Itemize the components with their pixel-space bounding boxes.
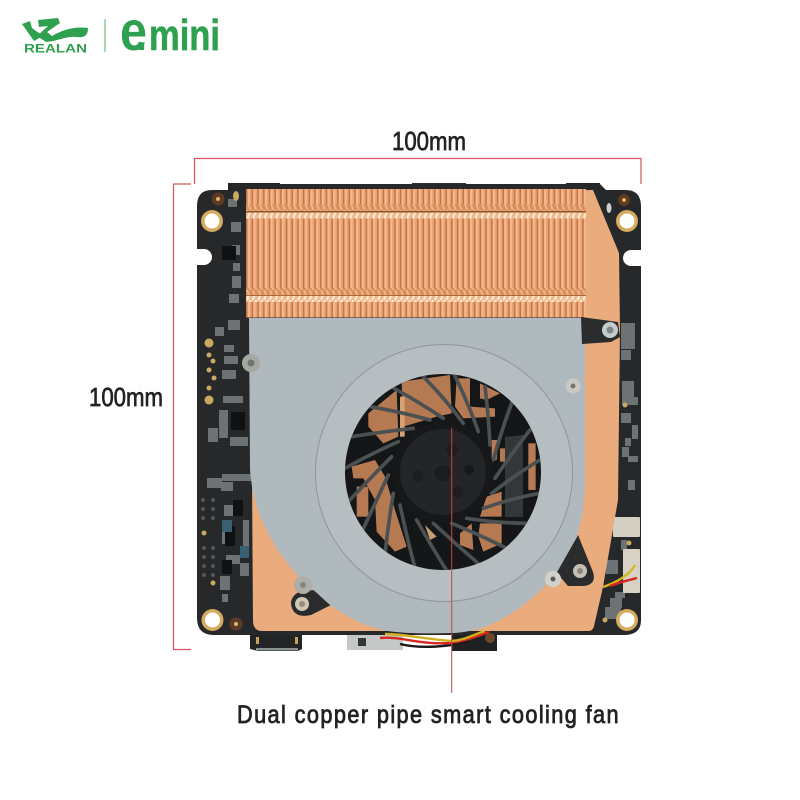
fan wires <box>380 565 637 647</box>
PCB components: left <box>201 199 252 602</box>
mounting holes <box>201 191 638 643</box>
text: eMini mini: mini <box>149 11 220 60</box>
icon: Realan mark <box>22 18 88 42</box>
PCB components: right <box>602 323 640 622</box>
screws <box>242 322 618 611</box>
product: mini PC board with cooler <box>197 183 641 651</box>
logo: Realan and eMini brand <box>22 0 220 62</box>
label: left dimension: 100mm <box>89 382 163 412</box>
fan blades <box>345 376 540 572</box>
fan opening <box>345 374 541 572</box>
text: eMini dot: . <box>137 20 146 58</box>
copper heat-sink fins <box>246 189 586 318</box>
bottom connectors <box>250 632 497 651</box>
divider <box>104 19 106 52</box>
PCB <box>197 184 641 635</box>
pointer line to fan <box>451 428 453 693</box>
top connectors <box>228 183 600 191</box>
dark shroud inside right <box>505 435 523 517</box>
dimension bracket: left 100mm <box>174 184 191 650</box>
text: eMini e: e <box>120 0 147 62</box>
bracket: lower right <box>556 535 594 586</box>
label: top dimension: 100mm <box>392 126 466 156</box>
fan hub <box>392 422 494 522</box>
fan housing <box>249 318 585 633</box>
caption: Dual copper pipe smart cooling fan <box>237 701 620 729</box>
dimension bracket: top 100mm <box>194 158 641 184</box>
bracket: upper right <box>581 317 620 344</box>
copper base plate <box>252 190 620 631</box>
bracket: lower left <box>291 590 335 616</box>
fan ring <box>316 344 572 602</box>
text: REALAN: REALAN <box>24 44 87 56</box>
copper heat pipes <box>352 375 536 552</box>
connector: beige header <box>613 517 640 537</box>
connector: fan header <box>623 549 640 593</box>
